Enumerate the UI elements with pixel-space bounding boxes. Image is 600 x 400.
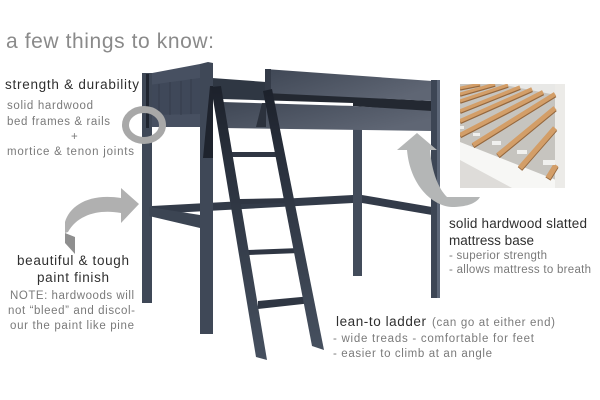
text block: slatted mattress base: - superior strength (449, 250, 547, 262)
text block: lean-to ladder (333, 314, 555, 360)
text block: strength and durability: strength & durability (5, 77, 139, 92)
text block: paint finish (8, 253, 135, 332)
lower right rail (222, 102, 432, 131)
right front post (431, 80, 440, 298)
text block: strength and durability: solid hardwood (7, 100, 93, 112)
centre post (200, 62, 213, 334)
text block: lean-to ladder: - easier to climb at an angle (333, 348, 492, 360)
text block: slatted mattress base (449, 216, 591, 276)
text block: paint finish: paint finish (37, 270, 109, 285)
ladder (203, 86, 324, 360)
headboard panel (147, 64, 200, 127)
text block: strength and durability (5, 77, 139, 158)
photo: slatted mattress base (460, 84, 565, 188)
title: a few things to know: (6, 30, 214, 53)
text block: lean-to ladder: (can go at either end) (432, 317, 555, 329)
text block: paint finish: beautiful & tough (17, 253, 129, 268)
text block: paint finish: our the paint like pine (10, 320, 134, 332)
dark gap between right-hand rails (266, 92, 432, 112)
rear lower rails (152, 195, 432, 215)
shadow brace under rail (256, 103, 266, 127)
arrow: to slatted base (397, 133, 480, 207)
text block: strength and durability: bed frames & rails (7, 116, 110, 128)
text block: paint finish: NOTE: hardwoods will (10, 290, 134, 302)
slats (460, 84, 556, 178)
text block: paint finish: not “bleed” and discol- (8, 305, 135, 317)
rear inner post (353, 125, 362, 276)
left stringer (211, 86, 267, 360)
dark brace on centre post (203, 86, 213, 158)
right stringer (263, 89, 324, 350)
arrow: to paint finish (65, 188, 139, 254)
text block: lean-to ladder: lean-to ladder (336, 314, 426, 329)
ladder rungs (232, 152, 312, 309)
slat spacers (460, 126, 555, 165)
upper right rail (265, 69, 432, 101)
illustration: loft bed frame (142, 62, 440, 360)
text block: strength and durability: + (71, 131, 78, 143)
text block: strength and durability: mortice & tenon joints (7, 146, 134, 158)
text block: slatted mattress base: solid hardwood slatted (449, 216, 587, 231)
slat shadows (460, 85, 556, 179)
text block: slatted mattress base: mattress base (449, 233, 534, 248)
left post (142, 73, 152, 303)
right-hand head of rail (265, 69, 271, 93)
white gap above lower rail (222, 99, 353, 106)
text block: lean-to ladder: - wide treads - comfortable for feet (333, 333, 535, 345)
callout ring (126, 110, 162, 140)
front lower rail (149, 207, 200, 228)
text block: slatted mattress base: - allows mattress to breath (449, 264, 591, 276)
upper rear rail behind headboard (212, 78, 266, 101)
